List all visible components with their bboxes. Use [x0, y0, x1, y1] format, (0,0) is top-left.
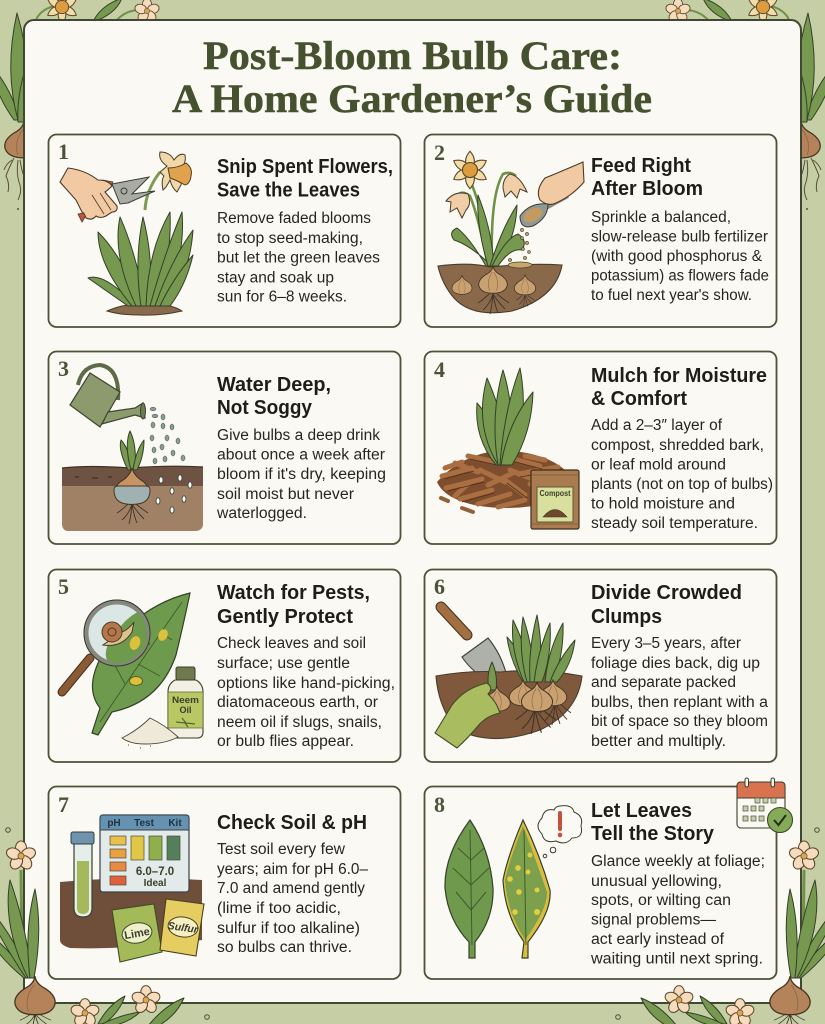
body text 8: signal problems— — [591, 912, 716, 928]
body text 3: about once a week after — [217, 446, 385, 464]
step number 1: 1 — [58, 139, 69, 164]
body text 6: and separate packed — [591, 674, 736, 691]
icon: lime bag — [112, 904, 162, 962]
icon: pH test kit: Ideal — [144, 878, 167, 889]
step number 4: 4 — [434, 357, 445, 382]
icon: thought bubble with exclamation — [538, 806, 582, 858]
icon: hand with scoop of fertilizer — [508, 162, 584, 268]
step number 2: 2 — [434, 140, 445, 165]
icon: bulb clump with leaves — [484, 615, 575, 734]
step number 3: 3 — [58, 356, 69, 381]
icon: pH test kit: Kit — [168, 818, 182, 829]
body text 5: options like hand-picking, — [217, 675, 395, 692]
body text 3 — [216, 427, 386, 522]
bottom-right border bulb, leaves and flowers — [616, 828, 825, 1024]
body text 8: unusual yellowing, — [591, 873, 722, 890]
heading 3 — [217, 374, 331, 419]
body text 7: 7.0 and amend gently — [217, 880, 365, 897]
body text 5: neem oil if slugs, snails, — [217, 714, 382, 731]
heading 8 — [591, 800, 715, 845]
icon: healthy leaf — [445, 820, 493, 958]
body text 2: Sprinkle a balanced, — [591, 209, 731, 226]
step number 6: 6 — [434, 574, 445, 599]
body text 1: but let the green leaves — [217, 250, 380, 266]
icon: test tube — [71, 832, 94, 917]
icon: pH test kit — [100, 815, 189, 892]
icon: daffodil stem and flower — [145, 152, 191, 210]
body text 4: or leaf mold around — [591, 456, 726, 474]
heading 5: Watch for Pests, — [217, 582, 370, 604]
icon: calendar with check mark — [737, 778, 792, 832]
panel: step 5 pests — [48, 570, 400, 762]
body text 6: better and multiply. — [591, 733, 726, 750]
icon: gardening glove — [435, 683, 500, 748]
icon: diatomaceous earth pile — [122, 718, 178, 748]
heading 6 — [591, 582, 742, 628]
icon: pH test kit: pH — [107, 818, 121, 829]
icon: sprouting bulb with roots — [114, 431, 150, 524]
icon: mulch pile — [437, 450, 565, 512]
panel: step 3 water deep — [48, 352, 400, 544]
icon: daffodil plant — [446, 151, 527, 266]
body text 6: bulbs, then replant with a — [591, 694, 768, 711]
panel: step 8 leaves tell the story — [424, 778, 792, 979]
body text 5: or bulb flies appear. — [217, 733, 354, 750]
body text 4: plants (not on top of bulbs) — [591, 476, 773, 493]
icon: leaf — [92, 593, 190, 735]
icon: trowel — [441, 607, 507, 682]
icon: pH test kit: Test — [134, 818, 155, 829]
icon: water drops — [150, 407, 185, 464]
body text 6: Every 3–5 years, after — [591, 635, 741, 652]
icon: magnifying glass and snail — [62, 600, 150, 692]
icon: compost bag — [531, 470, 579, 529]
body text 4: to hold moisture and — [591, 496, 735, 512]
icon: lime bag: Lime — [123, 926, 151, 942]
icon: leafy plant in mulch — [477, 368, 533, 465]
body text 2: potassium) as flowers fade — [591, 268, 769, 284]
body text 6: foliage dies back, dig up — [591, 655, 760, 672]
body text 3: bloom if it's dry, keeping — [217, 466, 386, 483]
heading 7: Check Soil & pH — [217, 812, 367, 834]
body text 1: stay and soak up — [217, 270, 334, 286]
top-left border bulb and flowers — [0, 0, 160, 210]
heading 3: Not Soggy — [217, 397, 313, 419]
heading 4: & Comfort — [591, 388, 687, 410]
body text 7 — [217, 841, 368, 956]
heading 4: Mulch for Moisture — [591, 365, 767, 387]
body text 1 — [217, 210, 380, 306]
heading 2 — [591, 155, 703, 200]
heading 1: Save the Leaves — [217, 180, 360, 202]
panel: step 6 divide clumps — [424, 570, 776, 762]
step number 5: 5 — [58, 574, 69, 599]
body text 1: to stop seed-making, — [217, 230, 363, 247]
icon: leafy plant on soil — [88, 212, 193, 315]
heading 4 — [591, 365, 767, 410]
heading 6: Divide Crowded — [591, 582, 742, 604]
icon: neem oil bottle: Neem — [172, 695, 199, 705]
body text 4: steady soil temperature. — [591, 515, 758, 532]
icon: soil bowl with three bulbs — [438, 264, 562, 314]
heading 6: Clumps — [591, 606, 662, 628]
bottom-left border bulb, leaves and flowers — [0, 828, 209, 1024]
body text 8 — [590, 853, 765, 968]
body text 7: (lime if too acidic, — [217, 900, 341, 917]
body text 5: diatomaceous earth, or — [217, 694, 378, 711]
icon: hand with pruners — [60, 168, 155, 222]
icon: sulfur bag: Sulfur — [167, 920, 200, 936]
heading 8: Tell the Story — [591, 823, 715, 845]
icon: soil bowl — [436, 671, 582, 739]
icon: watering can — [70, 365, 146, 427]
icon: neem oil bottle — [168, 667, 203, 738]
body text 5: surface; use gentle — [217, 655, 350, 672]
body text 3: waterlogged. — [216, 505, 307, 522]
icon: unhealthy leaf — [503, 820, 550, 958]
icon: neem oil bottle: Oil — [179, 705, 192, 715]
body text 1: Remove faded blooms — [217, 210, 371, 227]
body text 4: Add a 2–3″ layer of — [591, 417, 723, 434]
body text 7: Test soil every few — [217, 841, 346, 858]
heading 1: Snip Spent Flowers, — [217, 156, 393, 178]
heading 5: Gently Protect — [217, 606, 353, 628]
body text 2: (with good phosphorus & — [591, 248, 763, 265]
panel: step 4 mulch — [424, 352, 776, 544]
title — [172, 33, 652, 121]
body text 2: slow-release bulb fertilizer — [591, 228, 768, 246]
panel: step 7 soil and pH — [48, 786, 400, 979]
top-right border bulb and flowers — [665, 0, 825, 210]
heading 3: Water Deep, — [217, 374, 331, 396]
icon: compost bag: Compost — [540, 489, 571, 498]
panel: step 1 snip spent flowers — [48, 134, 400, 327]
body text 5: Check leaves and soil — [217, 635, 366, 652]
heading 5 — [217, 582, 370, 628]
heading 2: Feed Right — [591, 155, 691, 177]
body text 7: so bulbs can thrive. — [217, 939, 352, 956]
body text 8: spots, or wilting can — [591, 892, 731, 909]
heading 1 — [217, 156, 393, 202]
icon: sulfur bag — [160, 899, 204, 956]
body text 2: to fuel next year's show. — [591, 287, 752, 304]
body text 7: years; aim for pH 6.0– — [217, 861, 368, 878]
step number 8: 8 — [434, 792, 445, 817]
body text 8: Glance weekly at foliage; — [591, 853, 765, 870]
body text 7: sulfur if too alkaline) — [217, 920, 360, 937]
heading 8: Let Leaves — [591, 800, 692, 822]
body text 1: sun for 6–8 weeks. — [217, 288, 347, 306]
body text 6 — [591, 635, 768, 750]
body text 6: bit of space so they bloom — [591, 713, 768, 730]
body text 2 — [591, 209, 769, 304]
icon: soil block — [60, 878, 202, 948]
step number 7: 7 — [58, 792, 69, 817]
body text 3: soil moist but never — [217, 486, 354, 503]
heading 2: After Bloom — [591, 178, 703, 200]
title: A Home Gardener’s Guide — [172, 76, 652, 121]
title: Post-Bloom Bulb Care: — [203, 33, 622, 78]
body text 4: compost, shredded bark, — [591, 437, 764, 454]
body text 8: waiting until next spring. — [590, 950, 763, 968]
body text 3: Give bulbs a deep drink — [217, 427, 380, 444]
body text 4 — [591, 417, 773, 532]
panel: step 2 feed after bloom — [424, 134, 776, 327]
body text 8: act early instead of — [591, 931, 725, 948]
icon: pH test kit: 6.0–7.0 — [136, 866, 174, 878]
body text 5 — [217, 635, 395, 750]
icon: soil cross section — [62, 466, 203, 531]
